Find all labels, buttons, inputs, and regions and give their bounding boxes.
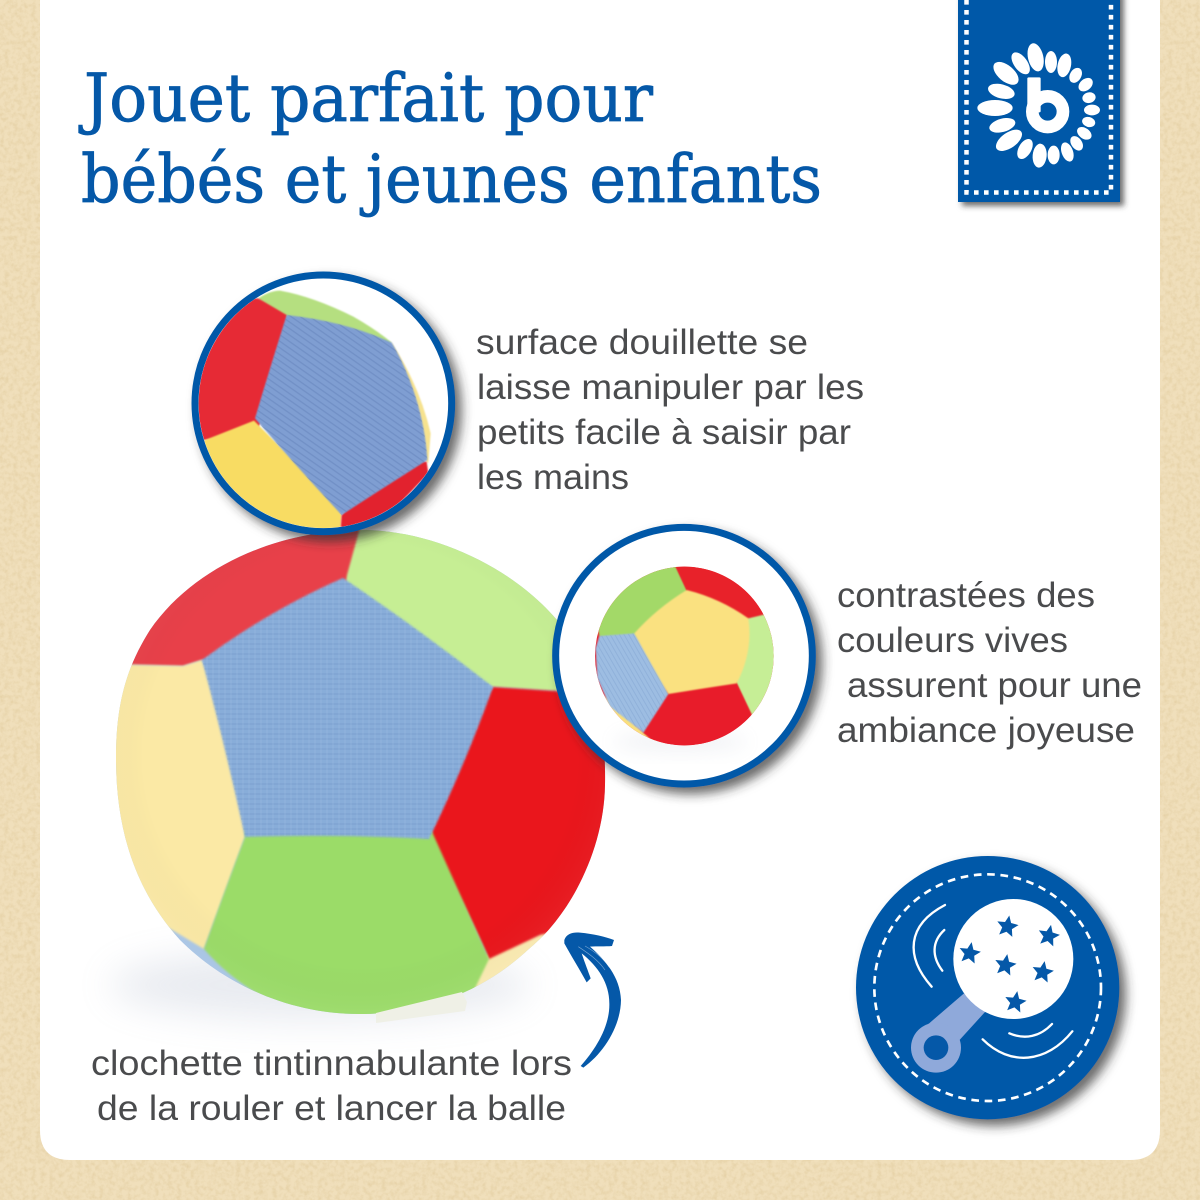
small ball green right panel [736,614,774,715]
small ball yellow sliver [604,695,662,742]
close-up yellow panel [204,420,342,528]
panel: bottom green [204,825,489,1030]
small ball red top panel [675,566,764,614]
brand tag with logo [958,0,1120,202]
panel: top red [132,530,360,667]
panel: yellow [116,658,245,950]
sewn label [376,992,467,1023]
text block: couleurs: contrastées des [837,576,1095,615]
close-up right yellow sliver [392,343,431,463]
text block: surface: laisse manipuler par les [477,368,864,407]
large plush ball [100,520,625,1030]
text block: couleurs: couleurs vives [837,621,1068,660]
rattle handle [911,993,985,1073]
arrow [564,933,621,1068]
small ball blue panel [596,633,668,733]
text block: surface: surface douillette se [476,323,808,362]
close-up green panel [258,290,392,343]
title: Jouet parfait pour [78,60,653,137]
small ball green top panel [598,567,687,638]
text block: surface: les mains [477,458,629,497]
small ball yellow pentagon [634,590,749,694]
small ball red bottom panel [642,682,752,746]
panel: right red [432,685,606,960]
small ball ground shadow [613,732,747,752]
panel: light green [345,530,557,692]
text block: clochette: de la rouler et lancer la balle [97,1089,566,1128]
text block: surface: petits facile à saisir par [477,413,851,452]
text block: surface [476,323,864,497]
close-up lower red panel [340,460,429,527]
badge: rattle icon [856,856,1119,1119]
icon: flower logo [977,42,1100,168]
small ball panels [590,565,777,755]
text block: clochette: clochette tintinnabulante lors [91,1044,572,1083]
callout circle: small whole ball [556,527,812,784]
panel: lower yellow sliver [463,930,549,993]
close-up red panel [198,297,288,440]
callout circle: fabric close-up [190,275,452,537]
close-up blue panel [255,315,427,515]
text block: clochette [91,1044,572,1128]
title [78,60,822,218]
text block: couleurs: assurent pour une [847,666,1142,705]
panel: blue pentagon [202,578,493,839]
rattle sound waves [914,905,1072,1058]
text block: couleurs [837,576,1142,750]
ball ground shadow [110,950,530,1020]
text block: couleurs: ambiance joyeuse [837,711,1135,750]
rattle head with stars [953,899,1073,1019]
title: bébés et jeunes enfants [81,141,822,218]
ball panels [116,530,606,1014]
